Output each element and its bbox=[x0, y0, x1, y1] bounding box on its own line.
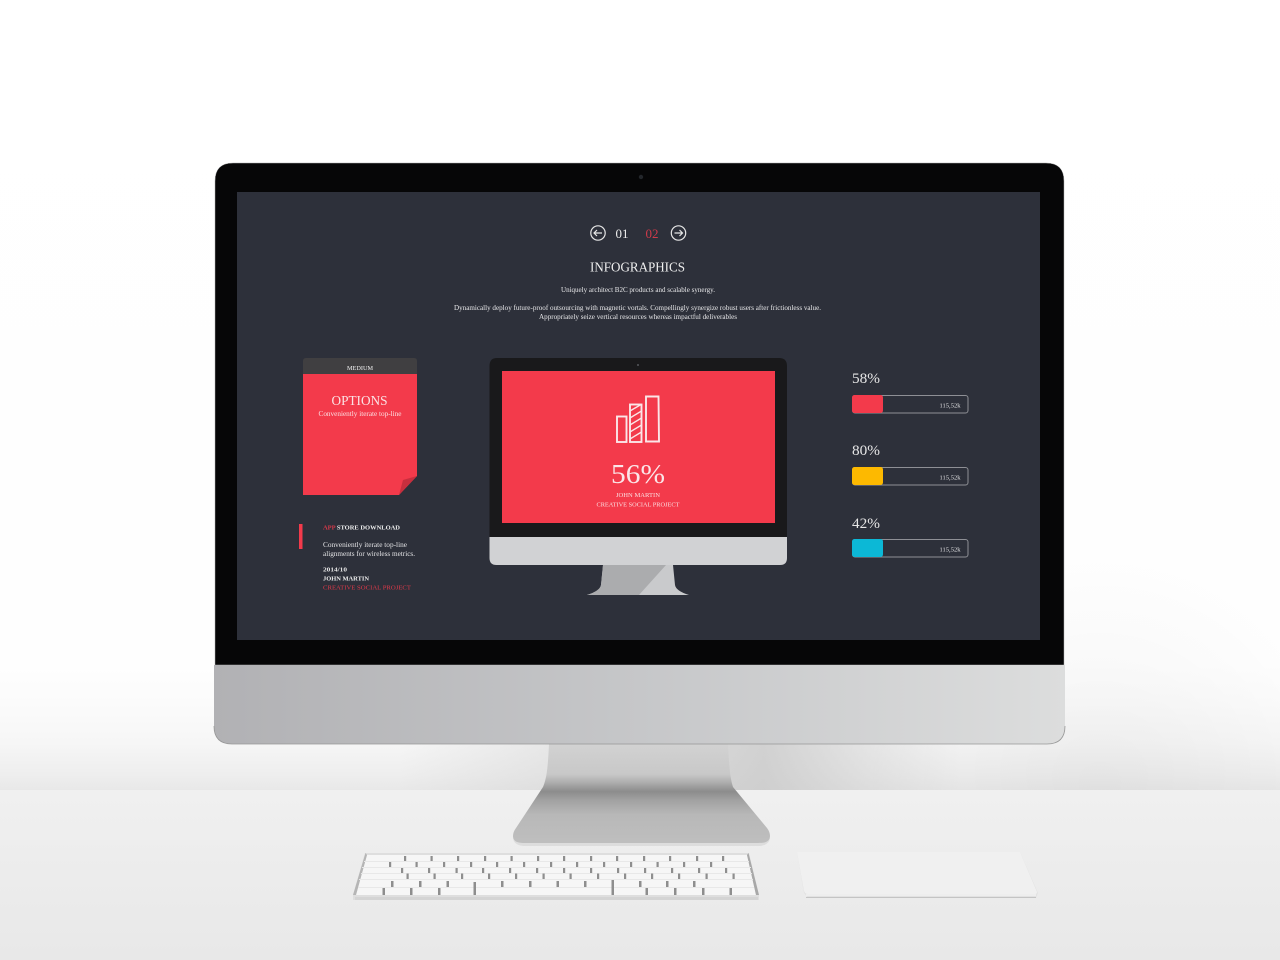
key gaps bbox=[382, 856, 735, 895]
note header label: MEDIUM bbox=[347, 365, 373, 372]
project: CREATIVE SOCIAL PROJECT bbox=[323, 584, 411, 592]
monitor screen bbox=[237, 192, 1040, 640]
progress bar: 80%: 115,52k bbox=[940, 474, 961, 482]
small monitor stand shadow bbox=[587, 565, 666, 595]
icon: left arrow bbox=[591, 226, 605, 240]
progress bar: 58%: 115,52k bbox=[940, 402, 961, 410]
intro text block: Appropriately seize vertical resources whereas impactful deliverables bbox=[539, 313, 737, 321]
large monitor bbox=[214, 163, 1065, 744]
progress bar: 42% bbox=[852, 516, 968, 557]
title: INFOGRAPHICS bbox=[590, 260, 685, 274]
note heading: OPTIONS bbox=[332, 394, 388, 409]
small monitor bezel bbox=[490, 358, 787, 537]
keyboard bbox=[353, 853, 759, 900]
download description bbox=[323, 541, 415, 558]
date: 2014/10 bbox=[323, 566, 347, 574]
progress bar: 58% bbox=[852, 371, 968, 413]
monitor bezel bbox=[215, 163, 1064, 665]
progress bar: 80%: 80% bbox=[852, 443, 880, 459]
progress bar: 42%: 115,52k bbox=[940, 546, 961, 554]
download description: alignments for wireless metrics. bbox=[323, 550, 415, 558]
small monitor stand bbox=[587, 565, 689, 595]
small monitor illustration bbox=[490, 358, 787, 595]
icon: bar chart bbox=[617, 396, 659, 442]
intro text block bbox=[454, 286, 821, 321]
progress bar: 58%: 58% bbox=[852, 371, 880, 387]
download description: Conveniently iterate top-line bbox=[323, 541, 407, 549]
intro text block: Uniquely architect B2C products and scalable synergy. bbox=[561, 286, 715, 294]
small monitor chin bbox=[490, 537, 787, 565]
project label: CREATIVE SOCIAL PROJECT bbox=[596, 502, 680, 508]
trackpad bbox=[797, 852, 1038, 898]
small monitor screen bbox=[502, 371, 775, 523]
progress bar: 42%: 42% bbox=[852, 516, 880, 532]
download heading: APP STORE DOWNLOAD bbox=[323, 524, 400, 532]
note subtitle: Conveniently iterate top-line bbox=[318, 410, 402, 418]
author label: JOHN MARTIN bbox=[616, 492, 660, 499]
progress bar: 80% bbox=[852, 443, 968, 485]
stand of the large monitor bbox=[513, 744, 770, 846]
monitor chin lower edge bbox=[214, 726, 1065, 744]
small monitor camera bbox=[637, 364, 639, 366]
note header bbox=[303, 358, 417, 374]
accent bar bbox=[299, 524, 302, 549]
monitor chin bbox=[214, 665, 1065, 744]
panel: options note bbox=[303, 358, 417, 495]
author: JOHN MARTIN bbox=[323, 576, 369, 582]
page number 02: 02 bbox=[646, 226, 658, 241]
percentage value: 56% bbox=[611, 459, 665, 489]
note folded corner bbox=[399, 476, 417, 495]
text block: app store download bbox=[299, 524, 415, 592]
note body bbox=[303, 374, 417, 495]
icon: right arrow bbox=[671, 226, 686, 240]
page number 01: 01 bbox=[616, 226, 628, 241]
intro text block: Dynamically deploy future-proof outsourcing with magnetic vortals. Compellingly synergize robust users after frictionless value. bbox=[454, 304, 821, 312]
webcam bbox=[639, 175, 643, 179]
pagination control bbox=[591, 226, 686, 241]
